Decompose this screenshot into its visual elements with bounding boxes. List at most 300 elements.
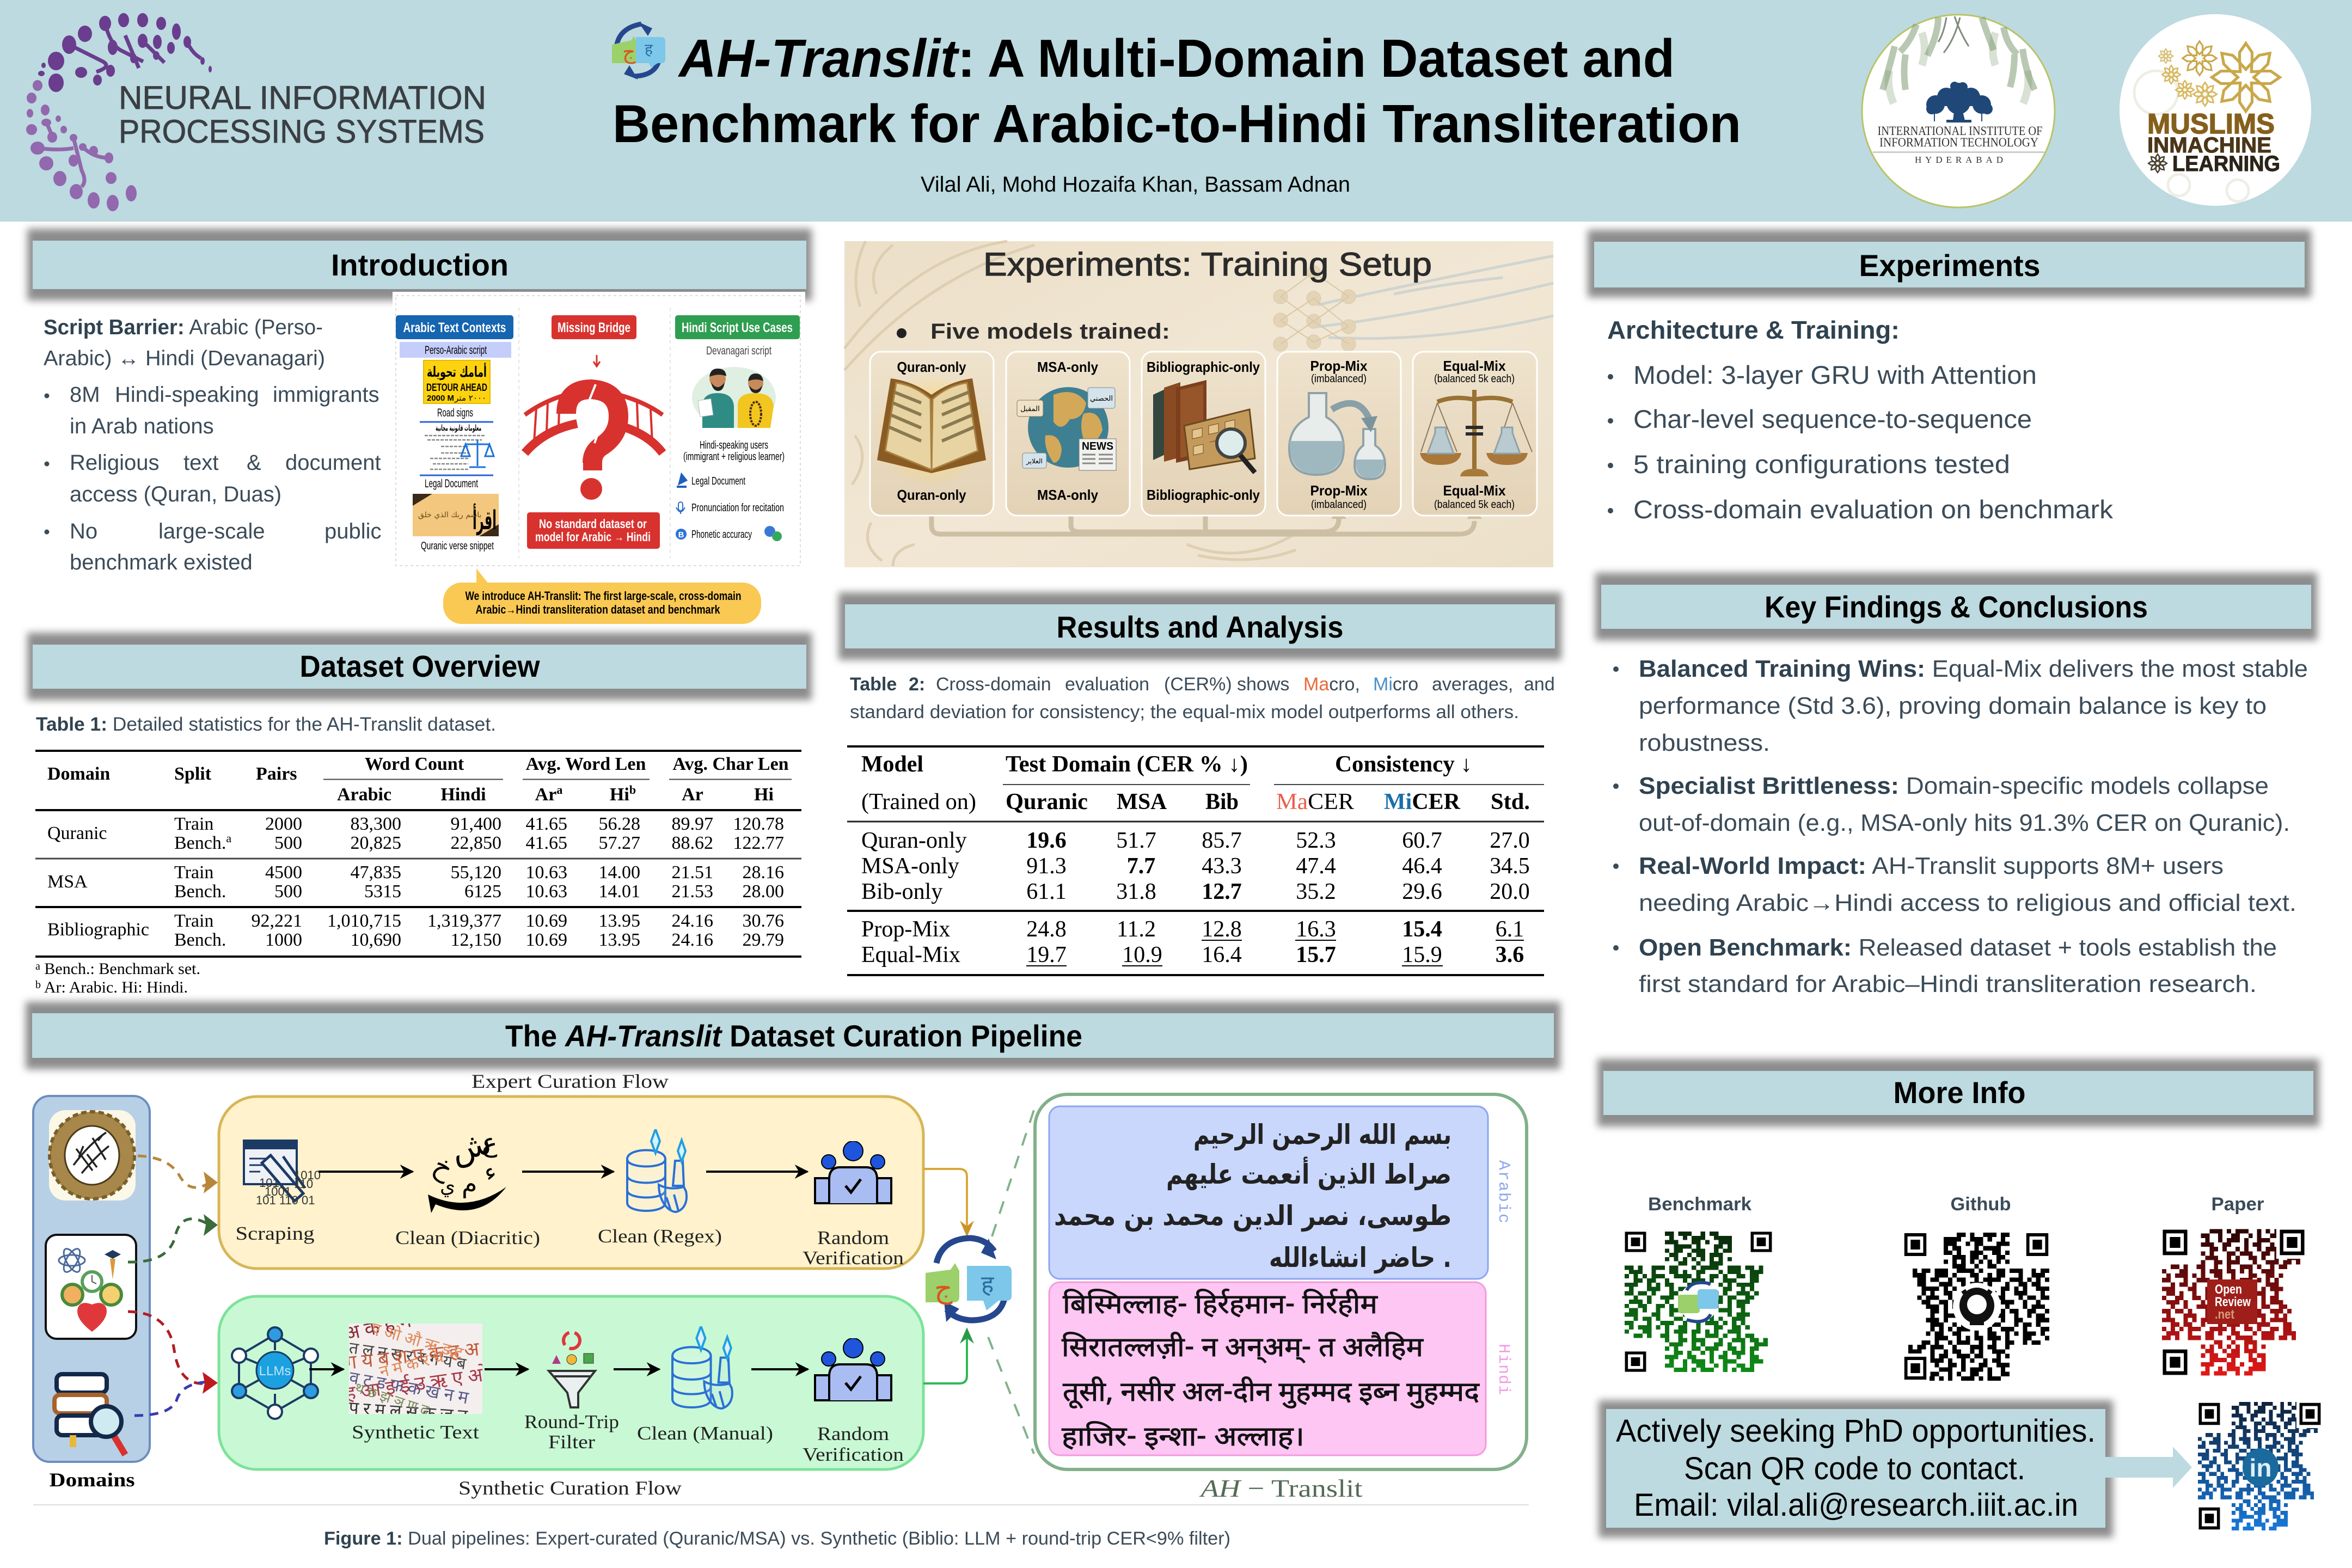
table 2: cross-domain evaluation: MSA: [1117, 789, 1167, 814]
panel: experiments training setup image: [844, 241, 1553, 567]
table 2: cross-domain evaluation: Bib: [1205, 789, 1239, 814]
table 2: cross-domain evaluation: [847, 746, 1544, 975]
box: Arabic sample: طوسی، نصر الدین محمد بن محمد: [1054, 1200, 1451, 1232]
step: clean diacritic: ع: [482, 1128, 498, 1158]
table 1: dataset statistics: Hindi: [440, 785, 486, 805]
arrow: [485, 1368, 528, 1370]
table 1: dataset statistics: 24.16: [672, 911, 713, 931]
card: MSA-only: [1006, 352, 1130, 516]
text block: script barrier bullets: immigrants: [273, 383, 379, 407]
arrow: MSA to expert flow: [128, 1214, 218, 1262]
table 2: cross-domain evaluation: Test Domain (CER % ↓): [1006, 752, 1248, 777]
table 1: dataset statistics: Train: [174, 862, 213, 883]
table 1: dataset statistics: 30.76: [743, 911, 784, 931]
arrow: [614, 1368, 659, 1370]
arrow: [309, 1368, 344, 1370]
table 2: cross-domain evaluation: 47.4: [1296, 854, 1336, 879]
table 2: cross-domain evaluation: 34.5: [1490, 854, 1530, 879]
text block: script barrier bullets: text: [183, 451, 218, 475]
table 1: dataset statistics: 56.28: [599, 814, 640, 834]
table 2: cross-domain evaluation: 15.7: [1296, 942, 1336, 967]
text block: script barrier bullets: in Arab nations: [70, 414, 214, 438]
text block: script barrier bullets: access (Quran, Duas): [70, 482, 281, 506]
box: Arabic sample: حاضر انشاءالله .: [1269, 1242, 1451, 1274]
table 2: cross-domain evaluation: 31.8: [1116, 879, 1156, 904]
step: scraping: 1001: [265, 1185, 291, 1198]
column: Arabic text contexts: باسم ربك الذي خلق: [418, 511, 481, 519]
panel: expert curation flow: [219, 1097, 923, 1269]
table 2: cross-domain evaluation: 11.2: [1117, 917, 1156, 942]
table 1: dataset statistics: Ar: Arabic. Hi: Hindi.: [44, 978, 188, 996]
table 2: cross-domain evaluation: Prop-Mix: [861, 917, 950, 942]
table 2: cross-domain evaluation: 12.8: [1202, 917, 1242, 942]
column: Arabic text contexts: اقرأ: [473, 503, 497, 536]
card: Prop-Mix: (imbalanced): [1311, 499, 1367, 511]
card: Equal-Mix: Equal-Mix: [1443, 358, 1506, 374]
column: Hindi script use cases: (immigrant + religious learner): [683, 451, 785, 463]
step: clean diacritic: [395, 1123, 540, 1248]
label: Domains: Domains: [49, 1469, 135, 1491]
table 1: dataset statistics: Avg. Word Len: [526, 754, 646, 774]
table 1: dataset statistics: b: [629, 783, 636, 797]
table 2: cross-domain evaluation: Quranic: [1006, 789, 1088, 814]
table 2: cross-domain evaluation: (Trained on): [861, 789, 976, 814]
column: Arabic text contexts: Legal Document: [425, 477, 478, 490]
step: synthetic text image: त ल न स र द ग य ब: [347, 1339, 468, 1376]
step: synthetic text image: ए ओ औ ऋ ड ट: [368, 1319, 465, 1366]
table 1: dataset statistics: 10.63: [526, 862, 567, 883]
logo: IIIT Hyderabad: [1862, 15, 2055, 207]
card: Bibliographic-only: Bibliographic-only: [1147, 487, 1260, 503]
heading: Dataset Overview: Dataset Overview: [299, 649, 540, 683]
icon: AH-Translit logo: ह: [981, 1271, 994, 1302]
card: Prop-Mix: Prop-Mix: [1310, 482, 1368, 499]
card: Equal-Mix: [1413, 352, 1537, 516]
text block: architecture and training: Architecture & Training:: [1607, 316, 1900, 344]
column: Hindi script use cases: Legal Document: [691, 475, 745, 487]
heading: Experiments Training Setup: Experiments: Training Setup: [983, 246, 1432, 283]
table 1: dataset statistics: 88.62: [672, 833, 713, 853]
table 2: cross-domain evaluation: 91.3: [1026, 854, 1067, 879]
callout: we introduce AH-Translit: [443, 568, 761, 624]
table 2: cross-domain evaluation: 60.7: [1402, 828, 1442, 853]
column: Hindi script use cases: B: [678, 530, 684, 540]
table 1: dataset statistics: Bench.: [174, 881, 226, 902]
table 1: dataset statistics: 10.63: [526, 881, 567, 902]
caption: table 2: Ma: [1303, 674, 1329, 695]
card: MSA-only: MSA-only: [1037, 487, 1098, 503]
text block: script barrier bullets: [44, 316, 382, 574]
icon: AH-Translit logo: ह: [645, 41, 653, 61]
step: random verification: [803, 1338, 904, 1465]
caption: table 2: Cross-domain: [936, 674, 1051, 695]
text block: script barrier bullets: large-scale: [158, 519, 265, 543]
step: random verification: Random: [817, 1423, 889, 1444]
step: scraping: 1010: [294, 1168, 321, 1182]
table 2: cross-domain evaluation: Consistency ↓: [1335, 752, 1472, 777]
table 1: dataset statistics: Ar: [682, 785, 703, 805]
text block: findings: out-of-domain (e.g., MSA-only hits 91.3% CER on Quranic).: [1639, 810, 2290, 836]
table 2: cross-domain evaluation: 35.2: [1296, 879, 1336, 904]
text: five models trained: Five models trained:: [930, 320, 1170, 344]
table 1: dataset statistics: 500: [274, 881, 302, 902]
table 1: dataset statistics: 41.65: [526, 833, 567, 853]
table 2: cross-domain evaluation: 10.9: [1122, 942, 1162, 967]
text block: script barrier bullets: Religious: [70, 451, 160, 475]
step: synthetic text image: ह आ इ ई उ ऋ ए ओ: [344, 1362, 491, 1408]
icon: AH-Translit logo: [926, 1238, 1012, 1322]
column: Arabic text contexts: أمامك تحويلة: [427, 363, 487, 381]
table 2: cross-domain evaluation: 16.3: [1296, 917, 1336, 942]
step: synthetic text image: थ छ झ ञ ण ढ: [352, 1380, 431, 1421]
step: LLM network: [232, 1327, 318, 1419]
arrow: expert flow to logo: [923, 1169, 974, 1237]
card: Prop-Mix: Prop-Mix: [1310, 358, 1368, 374]
text block: findings: first standard for Arabic–Hindi transliteration research.: [1639, 971, 2257, 997]
column: Arabic text contexts: [396, 315, 513, 552]
text block: architecture and training: Char-level sequence-to-sequence: [1633, 405, 2032, 433]
title: AH-Translit: A Multi-Domain Dataset and: [677, 28, 1675, 88]
table 2: cross-domain evaluation: 7.7: [1127, 854, 1155, 879]
QR code: Github: [1901, 1194, 2051, 1383]
step: random verification: Verification: [803, 1444, 904, 1465]
step: scraping: 101 110 01: [256, 1193, 315, 1207]
table 1: dataset statistics: 10,690: [351, 930, 401, 950]
arrow: [706, 1171, 807, 1173]
table 1: dataset statistics: 2000: [265, 814, 302, 834]
heading: More Info: [1597, 1059, 2319, 1126]
table 1: dataset statistics: a: [226, 831, 231, 845]
table 1: dataset statistics: 120.78: [733, 814, 784, 834]
heading: More Info: More Info: [1894, 1075, 2025, 1110]
logo text: Neural Information Processing Systems: PROCESSING SYSTEMS: [119, 113, 485, 150]
caption: table 2: (CER%): [1164, 674, 1232, 695]
step: synthetic text image: प र म ल स क ज त: [348, 1398, 469, 1429]
caption: table 2: averages,: [1432, 674, 1513, 695]
table 1: dataset statistics: 6125: [464, 881, 501, 902]
label: Synthetic Curation Flow: Synthetic Curation Flow: [458, 1477, 682, 1499]
card: MSA-only: NEWS: [1082, 440, 1113, 452]
step: round-trip filter: Filter: [548, 1431, 595, 1453]
label: AH - Translit: AH − Translit: [1199, 1474, 1363, 1502]
step: clean manual: Clean (Manual): [637, 1423, 773, 1444]
logo text: Neural Information Processing Systems: [119, 79, 486, 150]
table 2: cross-domain evaluation: 19.6: [1026, 828, 1067, 853]
panel: key findings and conclusions: [1595, 573, 2317, 997]
callout: PhD opportunities: Email: vilal.ali@research.iiit.ac.in: [1634, 1487, 2078, 1523]
caption: table 2: cro: [1393, 674, 1418, 695]
icon: Quran medallion: [49, 1110, 136, 1200]
text block: findings: Balanced Training Wins: Equal-Mix delivers the most stable: [1639, 656, 2308, 682]
card: MSA-only: المقبل: [1020, 405, 1040, 413]
card: MSA-only: MSA-only: [1037, 359, 1098, 375]
title: Benchmark for Arabic-to-Hindi Transliteration: [612, 94, 1741, 154]
step: clean diacritic: ي: [440, 1175, 455, 1197]
table 1: dataset statistics: 14.00: [599, 862, 640, 883]
table 2: cross-domain evaluation: 24.8: [1026, 917, 1067, 942]
text block: findings: [1613, 656, 2308, 997]
column: missing bridge: model for Arabic → Hindi: [535, 530, 651, 544]
text block: script barrier bullets: Arabic) ↔ Hindi (Devanagari): [44, 347, 325, 370]
step: scraping: Scraping: [235, 1223, 315, 1244]
logo: Muslims in Machine Learning: INMACHINE: [2147, 133, 2271, 157]
box: Hindi sample: हाजिर- इन्शा- अल्लाह।: [1062, 1421, 1304, 1457]
text block: findings: needing Arabic→Hindi access to religious and official text.: [1639, 890, 2296, 916]
panel: experiments text: [1588, 230, 2311, 524]
callout: PhD opportunities: Scan QR code to contact.: [1684, 1451, 2025, 1486]
caption: table 2: cro,: [1329, 674, 1360, 695]
table 2: cross-domain evaluation: 61.1: [1026, 879, 1067, 904]
caption: table 1: Table 1: Detailed statistics for the AH-Translit dataset.: [36, 714, 496, 735]
table 2: cross-domain evaluation: 6.1: [1496, 917, 1524, 942]
figure: missing bridge illustration: [393, 292, 805, 568]
arrow: dashed zoom lines: [988, 1104, 1036, 1454]
card: Quran-only: [870, 352, 994, 516]
column: Arabic text contexts: Quranic verse snippet: [421, 540, 494, 552]
logo: NeurIPS dot swirl: [26, 13, 212, 211]
arrow: [522, 1171, 614, 1173]
table 1: dataset statistics: 24.16: [672, 930, 713, 950]
arrow: bibliographic to synthetic flow: [128, 1312, 218, 1416]
table 2: cross-domain evaluation: MiCER: [1384, 789, 1461, 814]
heading: Dataset Overview: [27, 633, 812, 700]
table 1: dataset statistics: 500: [274, 833, 302, 853]
step: clean regex: Clean (Regex): [598, 1226, 722, 1247]
column: Hindi script use cases: Pronunciation for recitation: [691, 502, 784, 514]
QR code: Paper: Open: [2215, 1282, 2242, 1297]
table 1: dataset statistics: 4500: [265, 862, 302, 883]
logo: Muslims in Machine Learning: [2120, 14, 2311, 206]
table 2: cross-domain evaluation: 85.7: [1202, 828, 1242, 853]
text block: script barrier bullets: benchmark existed: [70, 550, 253, 574]
caption: table 2: Mi: [1373, 674, 1393, 695]
step: clean diacritic: م: [462, 1169, 477, 1198]
step: clean diacritic: Clean (Diacritic): [395, 1227, 540, 1248]
table 1: dataset statistics: 21.51: [672, 862, 713, 883]
table 1: dataset statistics: 29.79: [743, 930, 784, 950]
column: Hindi script use cases: [675, 315, 800, 541]
table 1: dataset statistics: 22,850: [451, 833, 501, 853]
column: Arabic text contexts: Arabic Text Contexts: [403, 320, 506, 335]
table 1: dataset statistics: 55,120: [451, 862, 501, 883]
table 2: cross-domain evaluation: MSA-only: [861, 854, 959, 879]
table 2: cross-domain evaluation: 15.4: [1402, 917, 1442, 942]
table 1: dataset statistics: 5315: [364, 881, 401, 902]
caption: table 2: shows: [1237, 674, 1289, 695]
table 1: dataset statistics: 1,010,715: [327, 911, 401, 931]
text block: architecture and training: 5 training configurations tested: [1633, 450, 2010, 479]
step: random verification: [803, 1141, 904, 1269]
logo: Muslims in Machine Learning: MUSLIMS: [2147, 108, 2275, 140]
box: Hindi sample: [1049, 1282, 1486, 1457]
column: Hindi script use cases: Hindi-speaking users: [700, 439, 768, 451]
table 1: dataset statistics: 14.01: [599, 881, 640, 902]
table 1: dataset statistics: 83,300: [351, 814, 401, 834]
caption: table 2: and: [1524, 674, 1555, 695]
QR code: Paper: [2159, 1194, 2308, 1379]
caption: table 2: standard deviation for consistency; the equal-mix model outperforms all others.: [850, 702, 1519, 722]
table 1: dataset statistics: 1,319,377: [427, 911, 501, 931]
column: Hindi script use cases: Hindi Script Use Cases: [682, 320, 793, 335]
panel: more info: [1597, 1059, 2324, 1538]
table 1: dataset statistics: 47,835: [351, 862, 401, 883]
table 1: dataset statistics: Bench.: [174, 930, 226, 950]
box: Arabic sample: [1049, 1106, 1488, 1279]
card: Bibliographic-only: [1142, 352, 1265, 516]
heading: Results and Analysis: Results and Analysis: [1056, 610, 1344, 644]
step: synthetic text image: व ट ड फ क ख न म: [347, 1368, 470, 1411]
box: Arabic sample: بسم الله الرحمن الرحيم: [1193, 1119, 1451, 1151]
card: Bibliographic-only: Bibliographic-only: [1147, 359, 1260, 375]
heading: Key Findings & Conclusions: [1595, 573, 2317, 640]
table 2: cross-domain evaluation: 20.0: [1490, 879, 1530, 904]
step: clean manual: [637, 1326, 773, 1444]
table 1: dataset statistics: MSA: [47, 872, 88, 892]
card: Prop-Mix: (imbalanced): [1311, 373, 1367, 385]
step: scraping: 101: [259, 1176, 279, 1190]
arrow: [318, 1171, 413, 1173]
step: clean diacritic: ء: [480, 1157, 500, 1187]
card: Equal-Mix: (balanced 5k each): [1434, 373, 1515, 385]
table 1: dataset statistics: Domain: [47, 764, 110, 784]
text block: findings: Real-World Impact: AH-Translit supports 8M+ users: [1639, 853, 2224, 879]
table 1: dataset statistics: 28.16: [743, 862, 784, 883]
text block: findings: Specialist Brittleness: Domain-specific models collapse: [1639, 773, 2269, 799]
authors: Vilal Ali, Mohd Hozaifa Khan, Bassam Adnan: [921, 173, 1350, 197]
table 1: dataset statistics: Bibliographic: [47, 920, 149, 940]
caption: table 2: 2:: [909, 674, 925, 695]
card: MSA-only: الحصني: [1090, 395, 1113, 403]
icon: books and magnifier: [54, 1374, 125, 1455]
table 1: dataset statistics: 57.27: [599, 833, 640, 853]
panel: synthetic curation flow: [219, 1295, 923, 1469]
table 2: cross-domain evaluation: 29.6: [1402, 879, 1442, 904]
logo: IIIT Hyderabad: INTERNATIONAL INSTITUTE OF: [1877, 124, 2043, 138]
callout: we introduce AH-Translit: Arabic→Hindi transliteration dataset and benchmark: [476, 603, 720, 616]
column: Arabic text contexts: معلومات قانونية مجانية: [436, 423, 481, 433]
table 1: dataset statistics: 21.53: [672, 881, 713, 902]
step: clean diacritic: خ: [428, 1149, 460, 1185]
QR code: Github: Github: [1950, 1194, 2011, 1215]
text block: script barrier bullets: Script Barrier: Arabic (Perso-: [44, 316, 323, 339]
table 2: cross-domain evaluation: MaCER: [1276, 789, 1354, 814]
arrow: to LinkedIn QR: [2105, 1447, 2192, 1488]
step: round-trip filter: [524, 1332, 619, 1453]
column: Arabic text contexts: Road signs: [437, 407, 473, 419]
text block: script barrier bullets: document: [285, 451, 381, 475]
table 1: dataset statistics: b: [35, 979, 41, 991]
text block: script barrier bullets: &: [247, 451, 261, 475]
card: Quran-only: Quran-only: [897, 359, 966, 375]
column: Arabic text contexts: ٢٠٠٠ متر: [454, 393, 486, 403]
table 1: dataset statistics: Hi: [610, 785, 629, 805]
text block: findings: Open Benchmark: Released dataset + tools establish the: [1639, 934, 2277, 961]
card: Equal-Mix: Equal-Mix: [1443, 482, 1506, 499]
column: Hindi script use cases: Phonetic accuracy: [691, 529, 752, 541]
table 1: dataset statistics: Quranic: [47, 823, 107, 843]
table 1: dataset statistics: 10.69: [526, 911, 567, 931]
table 1: dataset statistics: Hi: [754, 785, 774, 805]
step: clean regex: [598, 1129, 722, 1247]
box: Hindi sample: बिस्मिल्लाह- हिर्रहमान- निर्रहीम: [1063, 1289, 1378, 1325]
logo text: Neural Information Processing Systems: NEURAL INFORMATION: [119, 79, 486, 116]
table 2: cross-domain evaluation: 19.7: [1026, 942, 1067, 967]
table 2: cross-domain evaluation: Model: [861, 752, 923, 777]
caption: figure 1: Figure 1: Dual pipelines: Expert-curated (Quranic/MSA) vs. Synthetic (Biblio: LLM + round-trip CER<9% filter): [324, 1528, 1230, 1549]
step: synthetic text image: [342, 1295, 491, 1443]
logo: IIIT Hyderabad: INFORMATION TECHNOLOGY: [1879, 136, 2038, 149]
table 1: dataset statistics: 28.00: [743, 881, 784, 902]
icon: AH-Translit logo: [612, 22, 665, 79]
icon: AH-Translit logo: ج: [934, 1272, 953, 1305]
heading: pipeline: The AH-Translit Dataset Curation Pipeline: [505, 1019, 1082, 1053]
table 1: dataset statistics: Word Count: [365, 754, 464, 774]
step: synthetic text image: अ क ह म ज ल त र: [342, 1295, 481, 1349]
table 2: cross-domain evaluation: 15.9: [1402, 942, 1442, 967]
QR code: Benchmark: Benchmark: [1648, 1194, 1751, 1215]
table 2: cross-domain evaluation: Std.: [1491, 789, 1530, 814]
table 1: dataset statistics: Train: [174, 911, 213, 931]
table 1: dataset statistics: Arabic: [337, 785, 391, 805]
text block: findings: performance (Std 3.6), proving domain balance is key to: [1639, 693, 2267, 719]
table 1: dataset statistics: a: [35, 960, 40, 972]
table 1: dataset statistics: Bench.: [174, 833, 226, 853]
QR code: Benchmark: [1622, 1194, 1775, 1375]
icon: domain topics card: [46, 1235, 136, 1339]
QR code: Paper: .net: [2215, 1307, 2234, 1322]
QR code: Paper: Paper: [2212, 1194, 2264, 1215]
table 2: cross-domain evaluation: 16.4: [1202, 942, 1242, 967]
table 1: dataset statistics: 10.69: [526, 930, 567, 950]
callout: we introduce AH-Translit: We introduce AH-Translit: The first large-scale, cross-domain: [465, 589, 742, 603]
table 1: dataset statistics: 92,221: [252, 911, 302, 931]
label: Expert Curation Flow: Expert Curation Flow: [471, 1070, 669, 1092]
box: Hindi sample: सिरातल्लज़ी- न अन्अम्- त अलैहिम: [1062, 1332, 1424, 1368]
table 2: cross-domain evaluation: Quran-only: [861, 828, 967, 853]
table 1: dataset statistics: 20,825: [351, 833, 401, 853]
table 2: cross-domain evaluation: 51.7: [1116, 828, 1156, 853]
box: Hindi sample: तूसी, नसीर अल-दीन मुहम्मद इब्न मुहम्मद: [1063, 1376, 1480, 1412]
table 2: cross-domain evaluation: 52.3: [1296, 828, 1336, 853]
step: LLM network: LLMs: [259, 1364, 291, 1379]
table 1: dataset statistics: Bench.: Benchmark set.: [44, 960, 200, 978]
callout: PhD opportunities: Actively seeking PhD opportunities.: [1616, 1413, 2096, 1449]
step: synthetic text image: Synthetic Text: [352, 1422, 479, 1443]
column: missing bridge: [525, 315, 663, 549]
table 1: dataset statistics: Train: [174, 814, 213, 834]
QR code: Paper: Review: [2215, 1295, 2251, 1309]
step: scraping: [235, 1141, 321, 1244]
logo: Muslims in Machine Learning: LEARNING: [2172, 152, 2280, 176]
heading: pipeline: [26, 1002, 1560, 1069]
table 1: dataset statistics: 122.77: [733, 833, 784, 853]
label: Hindi vertical: Hindi: [1494, 1344, 1512, 1395]
heading: Experiments: [1588, 230, 2311, 297]
label: Arabic vertical: Arabic: [1494, 1160, 1512, 1223]
QR code: LinkedIn: in: [2250, 1454, 2271, 1482]
step: synthetic text image: ग य ब श प क ह अ: [345, 1338, 481, 1377]
table 1: dataset statistics: 13.95: [599, 911, 640, 931]
logo: IIIT Hyderabad: HYDERABAD: [1915, 155, 2003, 165]
table 1: dataset statistics: 89.97: [672, 814, 713, 834]
table 1: dataset statistics: Avg. Char Len: [672, 754, 789, 774]
table 1: dataset statistics: [35, 751, 801, 996]
panel: results and analysis: [838, 592, 1561, 975]
step: random verification: Verification: [803, 1247, 904, 1269]
column: Arabic text contexts: 2000 M: [427, 394, 454, 403]
table 2: cross-domain evaluation: 46.4: [1402, 854, 1442, 879]
caption: table 2: Table: [850, 674, 897, 695]
